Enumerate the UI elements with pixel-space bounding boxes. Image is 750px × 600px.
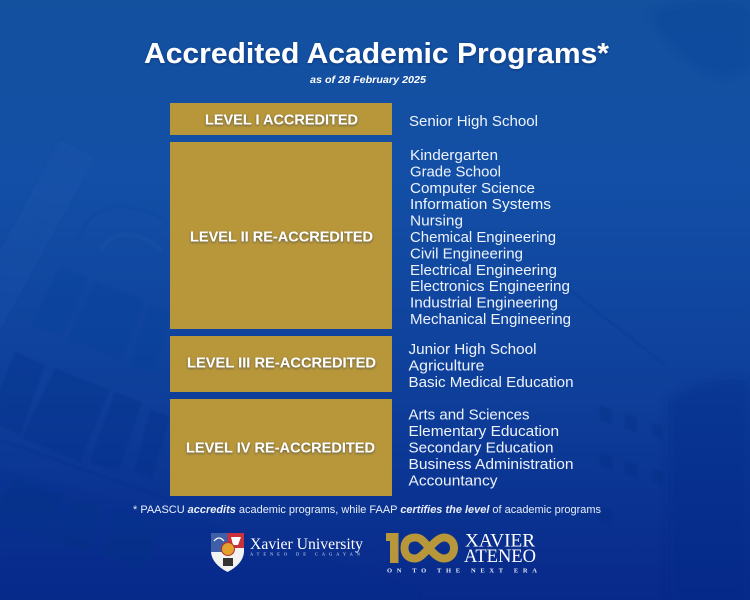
level II programs: Information Systems <box>410 197 551 213</box>
level II programs <box>410 148 571 328</box>
level III programs: Basic Medical Education <box>408 375 574 391</box>
logo text: Ateneo: ATENEO <box>464 547 536 567</box>
logo text: tagline: ON TO THE NEXT ERA <box>387 568 537 574</box>
title: Accredited Academic Programs* <box>144 38 610 70</box>
level II row <box>170 142 571 329</box>
level II box <box>170 142 392 329</box>
subtitle: date: as of 28 February 2025 <box>310 74 426 86</box>
level I row <box>170 103 538 135</box>
level II programs: Electrical Engineering <box>410 263 557 279</box>
level IV programs: Accountancy <box>408 474 498 490</box>
level II programs: Industrial Engineering <box>410 296 558 312</box>
level II programs: Electronics Engineering <box>410 279 570 295</box>
level IV programs <box>408 408 574 490</box>
level II programs: Computer Science <box>410 181 535 197</box>
icon: university shield <box>211 533 244 572</box>
level II programs: Mechanical Engineering <box>410 312 571 328</box>
level IV row <box>170 399 574 496</box>
level III row <box>170 336 574 392</box>
level I label: LEVEL I ACCREDITED <box>205 112 358 128</box>
background: faint trees <box>650 1 750 600</box>
logo: Xavier University <box>211 533 363 572</box>
level III label: LEVEL III RE-ACCREDITED <box>187 354 376 372</box>
level III programs: Agriculture <box>408 358 484 374</box>
level II programs: Grade School <box>410 164 501 180</box>
level II programs: Civil Engineering <box>410 246 523 262</box>
icon: gold 100 <box>386 533 454 563</box>
level III programs <box>408 342 574 391</box>
level II label: LEVEL II RE-ACCREDITED <box>190 228 373 246</box>
level I box <box>170 103 392 135</box>
background: faint building photo <box>0 140 665 600</box>
level II programs: Kindergarten <box>410 148 498 164</box>
logo text: Xavier University: Xavier University <box>250 536 363 553</box>
level III programs: Junior High School <box>408 342 536 358</box>
level IV programs: Arts and Sciences <box>408 408 530 424</box>
level IV label: LEVEL IV RE-ACCREDITED <box>186 440 375 456</box>
level II programs: Nursing <box>410 214 463 230</box>
level IV programs: Elementary Education <box>408 424 559 440</box>
logo: 100 Xavier Ateneo <box>386 532 537 574</box>
level I programs: Senior High School <box>409 114 538 130</box>
level IV programs: Business Administration <box>408 457 574 473</box>
logo text: Ateneo de Cagayan: ATENEO DE CAGAYAN <box>250 552 361 556</box>
level IV box <box>170 399 392 496</box>
level II programs: Chemical Engineering <box>410 230 556 246</box>
level III box <box>170 336 392 392</box>
logo text: Xavier: XAVIER <box>465 532 536 552</box>
level IV programs: Secondary Education <box>408 440 554 456</box>
footnote: * PAASCU accredits academic programs, while FAAP certifies the level of academic programs <box>133 504 601 516</box>
